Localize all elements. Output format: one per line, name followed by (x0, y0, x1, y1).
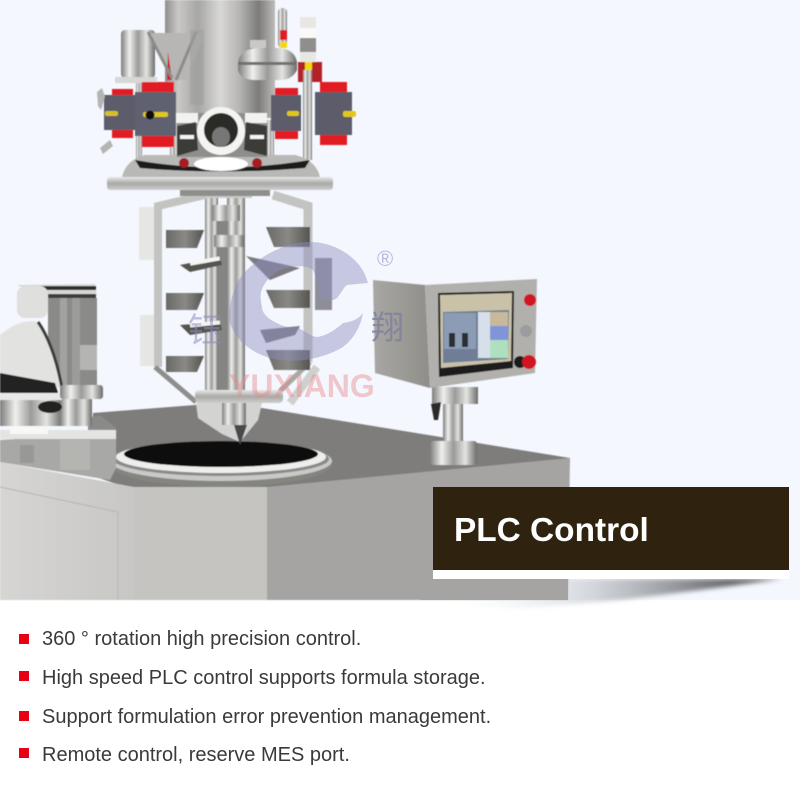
watermark chinese left: 钰 (188, 312, 222, 350)
hoppers and vessels (115, 8, 322, 168)
scraper frame (155, 195, 317, 403)
shadow beneath title banner (440, 579, 782, 608)
left machine lid (0, 284, 116, 480)
title banner (433, 487, 789, 579)
watermark chinese right: 翔 (371, 309, 404, 346)
bullet 3: Support formulation error prevention management. (42, 706, 491, 728)
bottom ring and tip (195, 390, 283, 445)
stirring shaft (198, 190, 252, 395)
central valve cluster (176, 107, 267, 171)
bullet 1: 360 ° rotation high precision control. (42, 628, 361, 650)
feature bullet list (19, 628, 491, 766)
fixed paddles (166, 227, 310, 372)
bullet 4: Remote control, reserve MES port. (42, 744, 350, 766)
watermark logo (229, 242, 368, 361)
background panel (0, 0, 800, 600)
registered mark: ® (377, 246, 393, 271)
rotating blades (180, 256, 300, 343)
machine artwork (0, 0, 570, 600)
pneumatic actuators (97, 82, 356, 154)
watermark YUXIANG: YUXIANG (229, 368, 375, 404)
control panel (373, 279, 537, 465)
central column (165, 0, 275, 118)
title banner: PLC Control (454, 512, 649, 549)
base cabinet (0, 405, 570, 600)
scraper blades (139, 207, 332, 366)
tank opening (110, 441, 332, 487)
dome and flange (107, 155, 333, 196)
cabinet edge over shadow (420, 579, 568, 600)
bullet 2: High speed PLC control supports formula storage. (42, 667, 486, 689)
